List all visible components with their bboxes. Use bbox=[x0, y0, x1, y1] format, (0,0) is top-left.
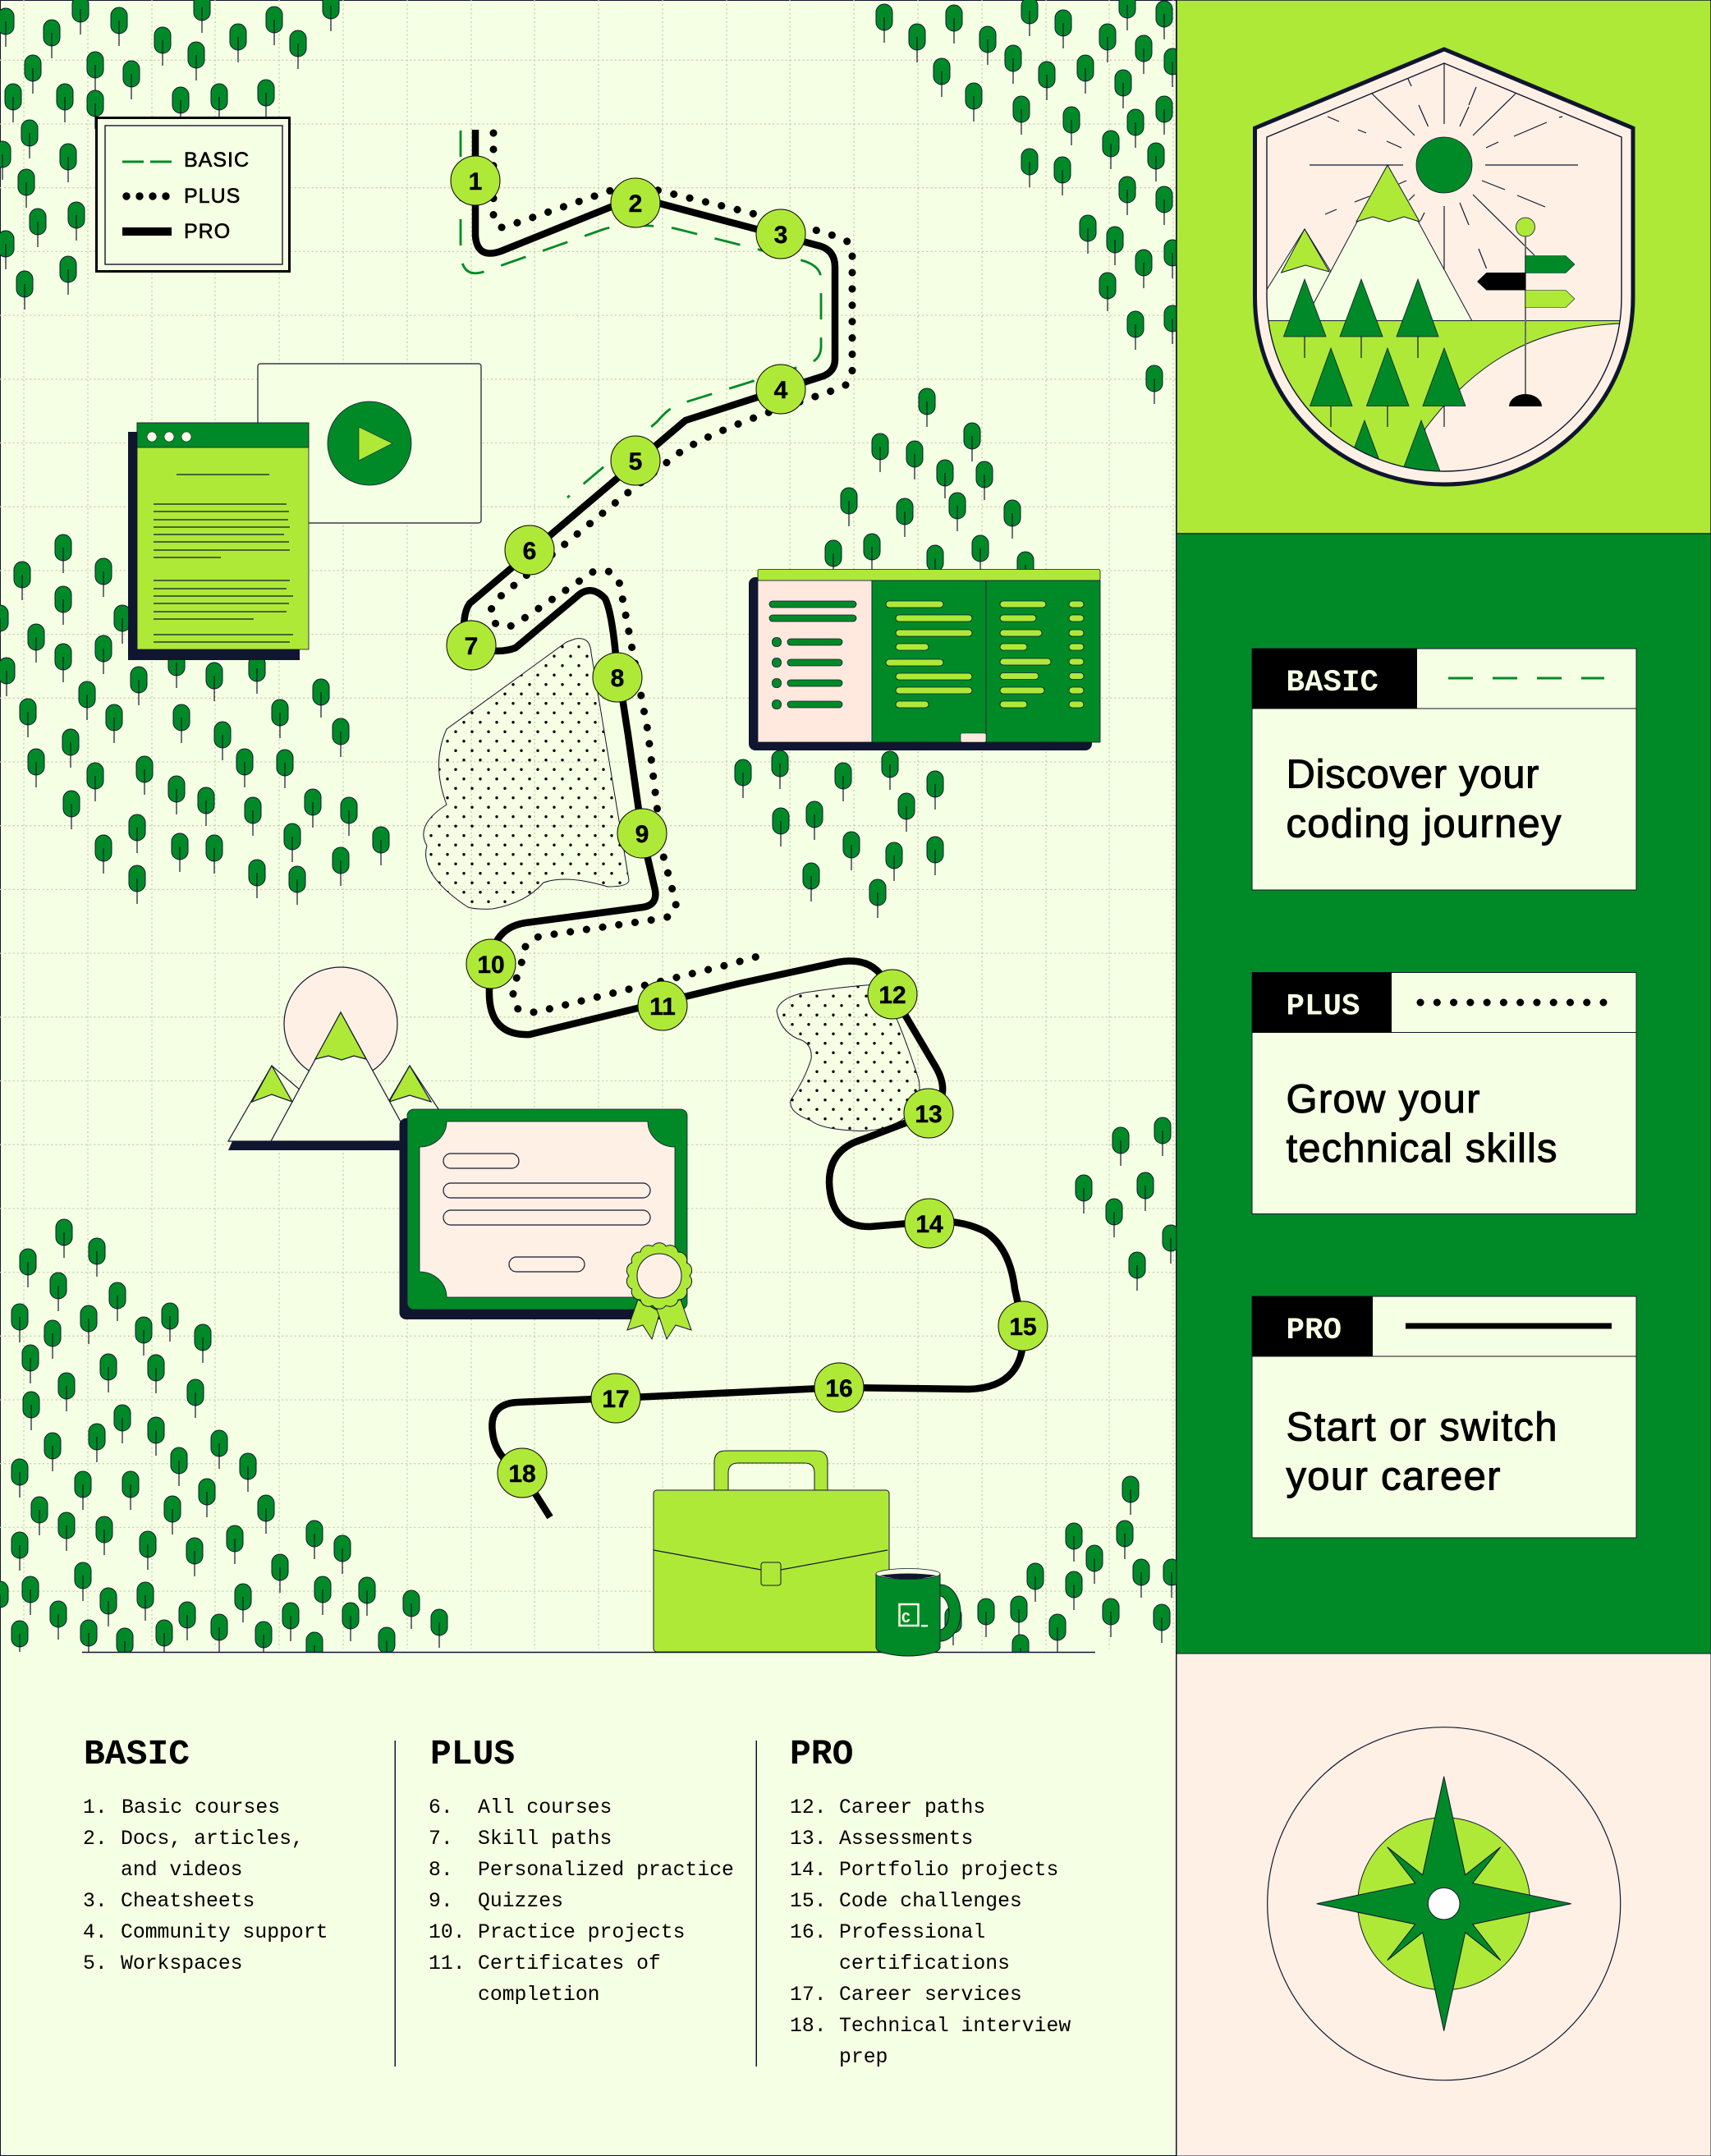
pine trees bbox=[1284, 279, 1466, 478]
stop 8: 8 bbox=[611, 665, 624, 692]
stop 16: 16 bbox=[825, 1375, 853, 1402]
legend: pro: PRO bbox=[184, 220, 231, 243]
stop 6: 6 bbox=[523, 538, 536, 565]
stop 12 bbox=[868, 970, 917, 1019]
stop 8 bbox=[593, 653, 642, 702]
stop 2: 2 bbox=[629, 190, 642, 218]
divider bbox=[755, 1741, 757, 2067]
stop 18 bbox=[498, 1448, 547, 1498]
list: plus: 9. bbox=[429, 1890, 453, 1913]
stop 10: 10 bbox=[477, 952, 505, 979]
card: pro bbox=[1252, 1296, 1636, 1538]
stop 10 bbox=[466, 939, 516, 989]
list: pro: 15. bbox=[790, 1890, 827, 1913]
stop 14 bbox=[905, 1199, 954, 1248]
card line: solid bbox=[1406, 1323, 1612, 1328]
list: pro: Professional bbox=[839, 1921, 985, 1944]
stop 1: 1 bbox=[469, 168, 482, 195]
stop 3: 3 bbox=[774, 222, 787, 249]
coffee mug bbox=[876, 1568, 955, 1656]
list: basic: Basic courses bbox=[122, 1796, 280, 1819]
stop 11 bbox=[638, 981, 687, 1030]
trees: top right cluster bbox=[876, 0, 1181, 404]
legend: basic: BASIC bbox=[184, 149, 250, 172]
list: pro: prep bbox=[839, 2046, 888, 2069]
list: pro: 12. bbox=[790, 1796, 827, 1819]
list: pro: Career services bbox=[839, 1984, 1022, 2007]
shield inner outline bbox=[1267, 63, 1622, 471]
editor: terminal lines bbox=[1000, 601, 1084, 708]
list: plus: PLUS bbox=[430, 1734, 515, 1774]
card line: dotted bbox=[1420, 998, 1603, 1007]
stop 4 bbox=[756, 365, 805, 414]
card tag: pro bbox=[1252, 1296, 1373, 1356]
route: plus dotted bbox=[491, 133, 852, 1012]
list: basic: 3. bbox=[83, 1890, 108, 1913]
document page bbox=[128, 423, 309, 660]
stop 17 bbox=[591, 1374, 640, 1423]
card heading: plus: Grow your bbox=[1286, 1077, 1479, 1122]
card tag: basic bbox=[1252, 649, 1417, 709]
list: pro: certifications bbox=[839, 1952, 1010, 1975]
trees: top left cluster bbox=[0, 0, 339, 310]
stop 13: 13 bbox=[915, 1101, 943, 1128]
video card with play button bbox=[258, 364, 481, 523]
stop 3 bbox=[756, 209, 805, 259]
list: basic bbox=[83, 1734, 328, 1975]
right column: lime panel bbox=[1177, 0, 1711, 534]
list: pro: Technical interview bbox=[839, 2015, 1071, 2038]
certificate bbox=[399, 1109, 692, 1339]
legend box bbox=[97, 118, 289, 271]
list: basic: Cheatsheets bbox=[121, 1890, 255, 1913]
card heading: pro: your career bbox=[1286, 1455, 1501, 1499]
list: pro: Portfolio projects bbox=[839, 1859, 1058, 1882]
list: pro: PRO bbox=[790, 1734, 853, 1774]
list: pro: Code challenges bbox=[839, 1890, 1022, 1913]
card: plus bbox=[1252, 972, 1636, 1213]
bottom section: feature lists bbox=[83, 1734, 1071, 2069]
list: plus: 6. bbox=[429, 1796, 453, 1819]
list: pro: 13. bbox=[790, 1828, 827, 1851]
list: pro: 18. bbox=[790, 2015, 827, 2038]
stop 5 bbox=[611, 436, 660, 485]
list: basic: 2. bbox=[83, 1828, 108, 1851]
list: basic: Community support bbox=[121, 1921, 328, 1944]
divider bbox=[394, 1741, 396, 2067]
icon: play button bbox=[328, 401, 411, 485]
stop 16 bbox=[814, 1363, 864, 1412]
card: basic bbox=[1252, 649, 1636, 890]
list: basic: Workspaces bbox=[121, 1952, 243, 1975]
stop 7: 7 bbox=[465, 633, 478, 660]
card line: dashed bbox=[1448, 677, 1604, 680]
winding path bbox=[1424, 323, 1619, 471]
trees: bottom left cluster bbox=[0, 1219, 447, 1671]
dotted terrain blob small bbox=[777, 984, 920, 1131]
signpost bbox=[1477, 218, 1575, 406]
card heading: basic: Discover your bbox=[1286, 752, 1539, 796]
editor: sidebar lines bbox=[769, 601, 856, 709]
stop 17: 17 bbox=[602, 1386, 630, 1413]
stop 4: 4 bbox=[774, 377, 788, 404]
list: pro: 14. bbox=[790, 1859, 827, 1882]
card heading: basic: coding journey bbox=[1286, 801, 1562, 846]
icon: ribbon seal bbox=[626, 1243, 692, 1339]
stop 15: 15 bbox=[1009, 1314, 1037, 1341]
trees: centre cluster bbox=[735, 388, 1034, 918]
card tag: pro: PRO bbox=[1286, 1314, 1342, 1348]
list: plus: 10. bbox=[429, 1921, 466, 1944]
route: pro solid bbox=[464, 130, 1023, 1517]
map background bbox=[0, 0, 1177, 2156]
small mountain bbox=[1268, 228, 1331, 320]
list: pro: Career paths bbox=[839, 1796, 985, 1819]
stop 5: 5 bbox=[629, 448, 642, 475]
compass rose bbox=[1268, 1727, 1621, 2080]
list: plus: 7. bbox=[429, 1828, 453, 1851]
stop 11: 11 bbox=[649, 993, 676, 1021]
list: plus bbox=[429, 1734, 734, 2007]
list: basic: 5. bbox=[83, 1952, 108, 1975]
route stops 1 to 18 bbox=[447, 156, 1048, 1498]
right column: green panel bbox=[1177, 534, 1711, 1654]
route: basic dashed bbox=[461, 131, 821, 498]
legend: pro bbox=[122, 220, 231, 243]
list: basic: 4. bbox=[83, 1921, 108, 1944]
meadow bbox=[1269, 320, 1619, 466]
trees: bottom right cluster bbox=[944, 1476, 1176, 1652]
list: pro bbox=[790, 1734, 1071, 2069]
stop 9: 9 bbox=[635, 821, 649, 848]
trees: left middle cluster bbox=[0, 534, 389, 905]
right column: cream panel bbox=[1177, 1654, 1711, 2156]
editor: code lines bbox=[886, 601, 972, 708]
list: basic: 1. bbox=[83, 1796, 108, 1819]
list: basic: Docs, articles, bbox=[121, 1828, 304, 1851]
stop 6 bbox=[505, 525, 554, 575]
stop 2 bbox=[611, 178, 660, 227]
card heading: plus: technical skills bbox=[1286, 1126, 1557, 1171]
stop 18: 18 bbox=[508, 1461, 536, 1488]
code editor window bbox=[749, 570, 1100, 750]
dotted terrain blob bbox=[424, 639, 629, 909]
list: plus: 11. bbox=[429, 1952, 466, 1975]
stop 7 bbox=[447, 621, 496, 670]
sun bbox=[1416, 137, 1472, 193]
stop 9 bbox=[617, 809, 667, 858]
card tag: plus bbox=[1252, 972, 1392, 1033]
card heading: pro: Start or switch bbox=[1286, 1406, 1557, 1450]
list: pro: 16. bbox=[790, 1921, 827, 1944]
forest trees bbox=[0, 0, 1181, 1673]
list: plus: 8. bbox=[429, 1859, 453, 1882]
stop 12: 12 bbox=[878, 982, 906, 1009]
list: plus: Practice projects bbox=[478, 1921, 685, 1944]
ground line bbox=[82, 1652, 1095, 1654]
large mountain bbox=[1304, 165, 1472, 321]
briefcase bbox=[654, 1451, 889, 1652]
legend: plus: PLUS bbox=[184, 185, 241, 208]
list: plus: Skill paths bbox=[478, 1828, 612, 1851]
shield badge bbox=[1247, 49, 1634, 493]
stop 14: 14 bbox=[915, 1211, 943, 1238]
stop 1 bbox=[451, 156, 500, 205]
list: plus: Certificates of bbox=[478, 1952, 661, 1975]
list: plus: Quizzes bbox=[478, 1890, 563, 1913]
list: basic: and videos bbox=[121, 1859, 243, 1882]
list: basic: BASIC bbox=[84, 1734, 190, 1774]
stop 13 bbox=[904, 1089, 953, 1138]
list: plus: completion bbox=[478, 1984, 600, 2007]
card tag: basic: BASIC bbox=[1286, 666, 1378, 700]
card tag: plus: PLUS bbox=[1286, 990, 1360, 1025]
list: pro: Assessments bbox=[839, 1828, 973, 1851]
legend: plus bbox=[122, 185, 241, 208]
sun rays bbox=[1310, 63, 1578, 269]
list: plus: Personalized practice bbox=[478, 1859, 734, 1882]
coffee mug: C bbox=[901, 1611, 911, 1627]
list: pro: 17. bbox=[790, 1984, 827, 2007]
stop 15 bbox=[998, 1301, 1048, 1351]
mountains with sun bbox=[228, 967, 460, 1150]
trees: right middle cluster bbox=[1076, 1117, 1179, 1291]
list: plus: All courses bbox=[478, 1796, 612, 1819]
